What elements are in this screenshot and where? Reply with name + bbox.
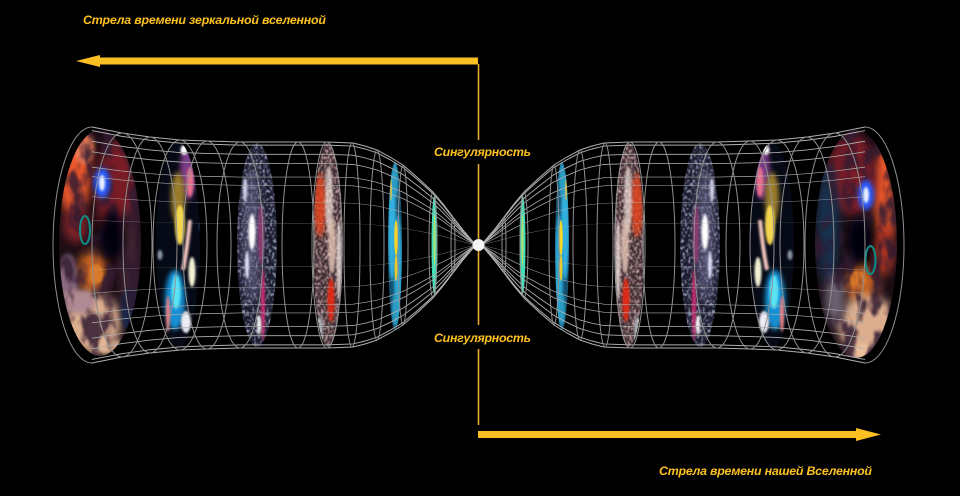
- disc 6: right: [520, 195, 526, 295]
- wireframe mesh: left funnel: [53, 127, 474, 363]
- label: singularity top: Сингулярность: [434, 145, 531, 159]
- icon: teal ring left: [80, 216, 90, 244]
- icon: singularity point: [472, 239, 484, 251]
- big disc: left universe edge: [57, 128, 141, 356]
- big disc: right universe edge: [814, 130, 899, 360]
- disc 5: right: [555, 162, 569, 330]
- disc 4: right: [614, 143, 644, 347]
- arrow: mirror universe time, leftward: [76, 55, 478, 67]
- disc 3: left: [237, 143, 277, 347]
- heading: our universe arrow of time: Стрела времени нашей Вселенной: [659, 464, 872, 478]
- left universe cross-sections: [57, 128, 438, 356]
- arrow: our universe time, rightward: [478, 428, 881, 441]
- disc 6: left: [432, 195, 438, 295]
- wireframe mesh: right funnel: [483, 127, 904, 363]
- right universe cross-sections: [520, 130, 899, 360]
- disc 2: left: [156, 142, 202, 348]
- heading: mirror universe arrow of time: Стрела времени зеркальной вселенной: [83, 13, 326, 27]
- label: singularity bottom: Сингулярность: [434, 331, 531, 345]
- disc 2: right: [748, 142, 794, 348]
- disc 3: right: [680, 143, 720, 347]
- disc 4: left: [313, 143, 343, 347]
- icon: teal ring right: [866, 246, 876, 274]
- disc 5: left: [388, 162, 402, 330]
- vertical time axis: [478, 64, 480, 425]
